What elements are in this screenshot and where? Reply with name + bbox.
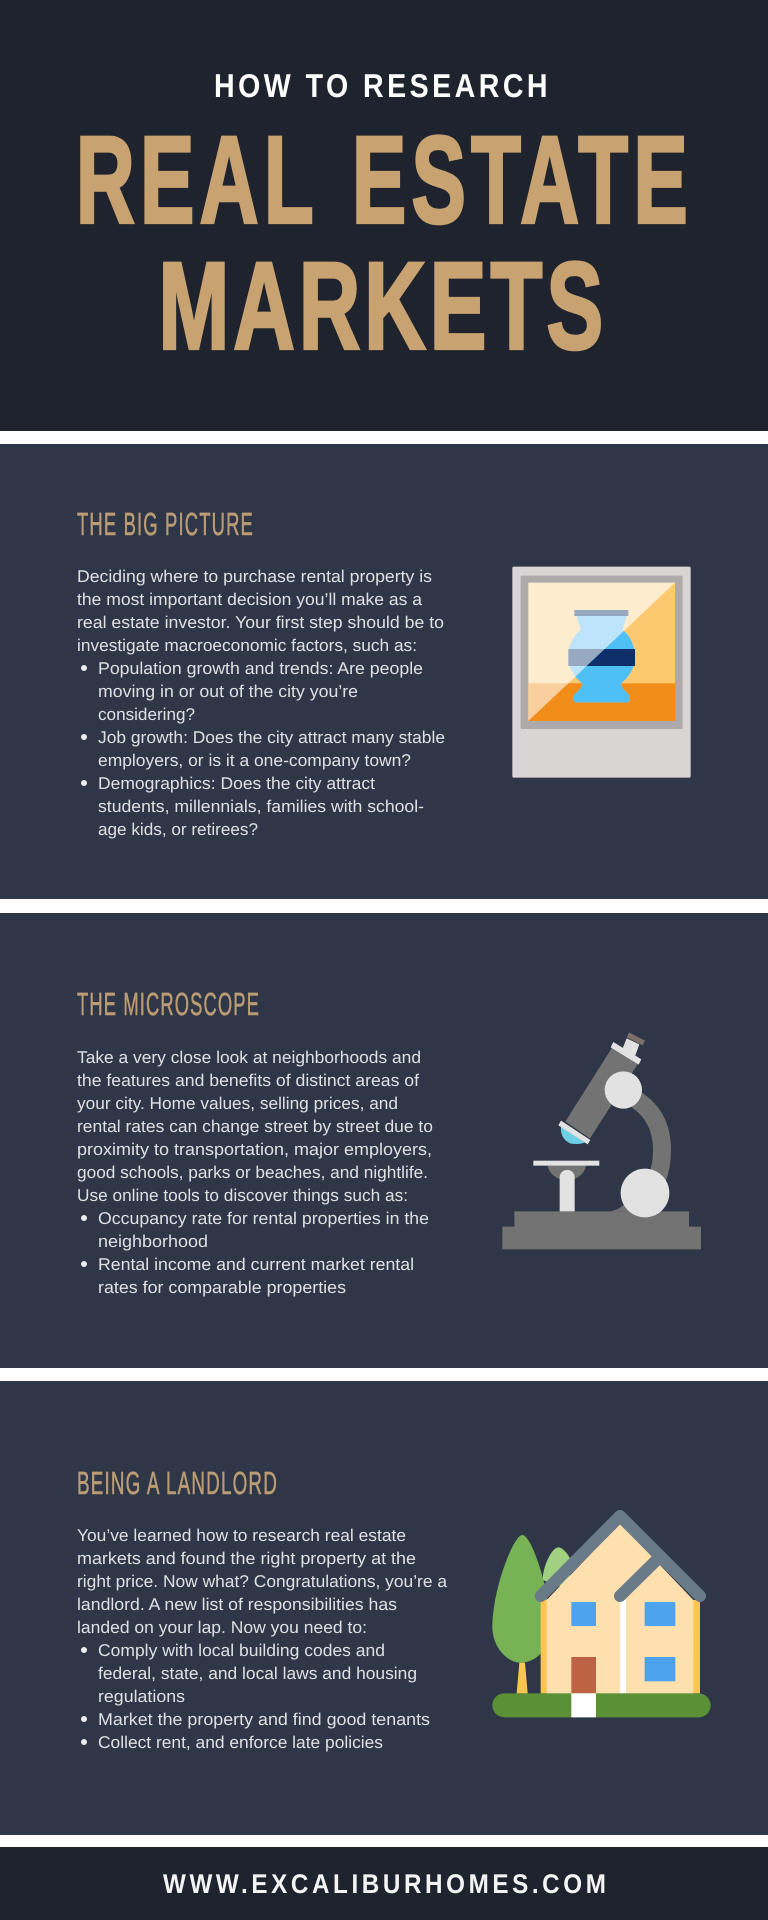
panel: the microscope: [0, 913, 768, 1368]
text block: the microscope: rates for comparable properties: [98, 1278, 346, 1297]
text block: the microscope: Use online tools to discover things such as:: [77, 1186, 408, 1205]
icon: microscope: [502, 1032, 701, 1249]
main title: [76, 112, 693, 376]
text block: the big picture: the most important decision you’ll make as a: [77, 590, 423, 609]
text block: the big picture: real estate investor. Your first step should be to: [77, 613, 444, 632]
text block: being a landlord: You’ve learned how to research real estate: [77, 1526, 406, 1545]
footer website url: WWW.EXCALIBURHOMES.COM: [163, 1869, 610, 1899]
icon: house with trees: [492, 1516, 711, 1717]
text block: the big picture: Population growth and trends: Are people: [98, 659, 423, 678]
text block: the big picture: Demographics: Does the city attract: [98, 774, 375, 793]
text block: the big picture: Deciding where to purchase rental property is: [77, 567, 432, 586]
text block: being a landlord: Market the property and find good tenants: [98, 1710, 430, 1729]
text block: the microscope: the features and benefits of distinct areas of: [77, 1071, 419, 1090]
text block: the big picture: age kids, or retirees?: [98, 820, 258, 839]
footer banner: [0, 1847, 768, 1920]
text block: being a landlord: Comply with local building codes and: [98, 1641, 385, 1660]
text block: the microscope: good schools, parks or beaches, and nightlife.: [77, 1163, 428, 1182]
text block: the big picture: Job growth: Does the city attract many stable: [98, 728, 445, 747]
text block: the microscope: your city. Home values, selling prices, and: [77, 1094, 398, 1113]
text block: the big picture: employers, or is it a one-company town?: [98, 751, 411, 770]
text block: being a landlord: landed on your lap. Now you need to:: [77, 1618, 367, 1637]
text block: being a landlord: Collect rent, and enforce late policies: [98, 1733, 383, 1752]
text block: being a landlord: federal, state, and local laws and housing: [98, 1664, 417, 1683]
text block: the microscope: proximity to transportation, major employers,: [77, 1140, 432, 1159]
text block: being a landlord: [77, 1526, 448, 1752]
header banner: [0, 0, 768, 431]
text block: the microscope: neighborhood: [98, 1232, 208, 1251]
text block: being a landlord: landlord. A new list of responsibilities has: [77, 1595, 397, 1614]
panel: the big picture: [0, 444, 768, 899]
text block: being a landlord: right price. Now what? Congratulations, you’re a: [77, 1572, 448, 1591]
text block: the big picture: investigate macroeconomic factors, such as:: [77, 636, 417, 655]
heading: the big picture: THE BIG PICTURE: [77, 506, 254, 542]
text block: the microscope: Take a very close look at neighborhoods and: [77, 1048, 421, 1067]
heading: being a landlord: BEING A LANDLORD: [77, 1465, 278, 1501]
panel: being a landlord: [0, 1381, 768, 1835]
text block: the microscope: rental rates can change street by street due to: [77, 1117, 433, 1136]
text block: the big picture: considering?: [98, 705, 195, 724]
subtitle: HOW TO RESEARCH: [214, 67, 551, 104]
text block: the big picture: [77, 567, 445, 839]
icon: framed picture of vase: [512, 567, 691, 778]
text block: the microscope: Rental income and current market rental: [98, 1255, 414, 1274]
text block: the big picture: students, millennials, families with school-: [98, 797, 424, 816]
text block: being a landlord: regulations: [98, 1687, 185, 1706]
heading: the microscope: THE MICROSCOPE: [77, 986, 260, 1022]
text block: the microscope: [77, 1048, 433, 1297]
text block: the microscope: Occupancy rate for rental properties in the: [98, 1209, 429, 1228]
text block: being a landlord: markets and found the right property at the: [77, 1549, 416, 1568]
text block: the big picture: moving in or out of the city you’re: [98, 682, 358, 701]
